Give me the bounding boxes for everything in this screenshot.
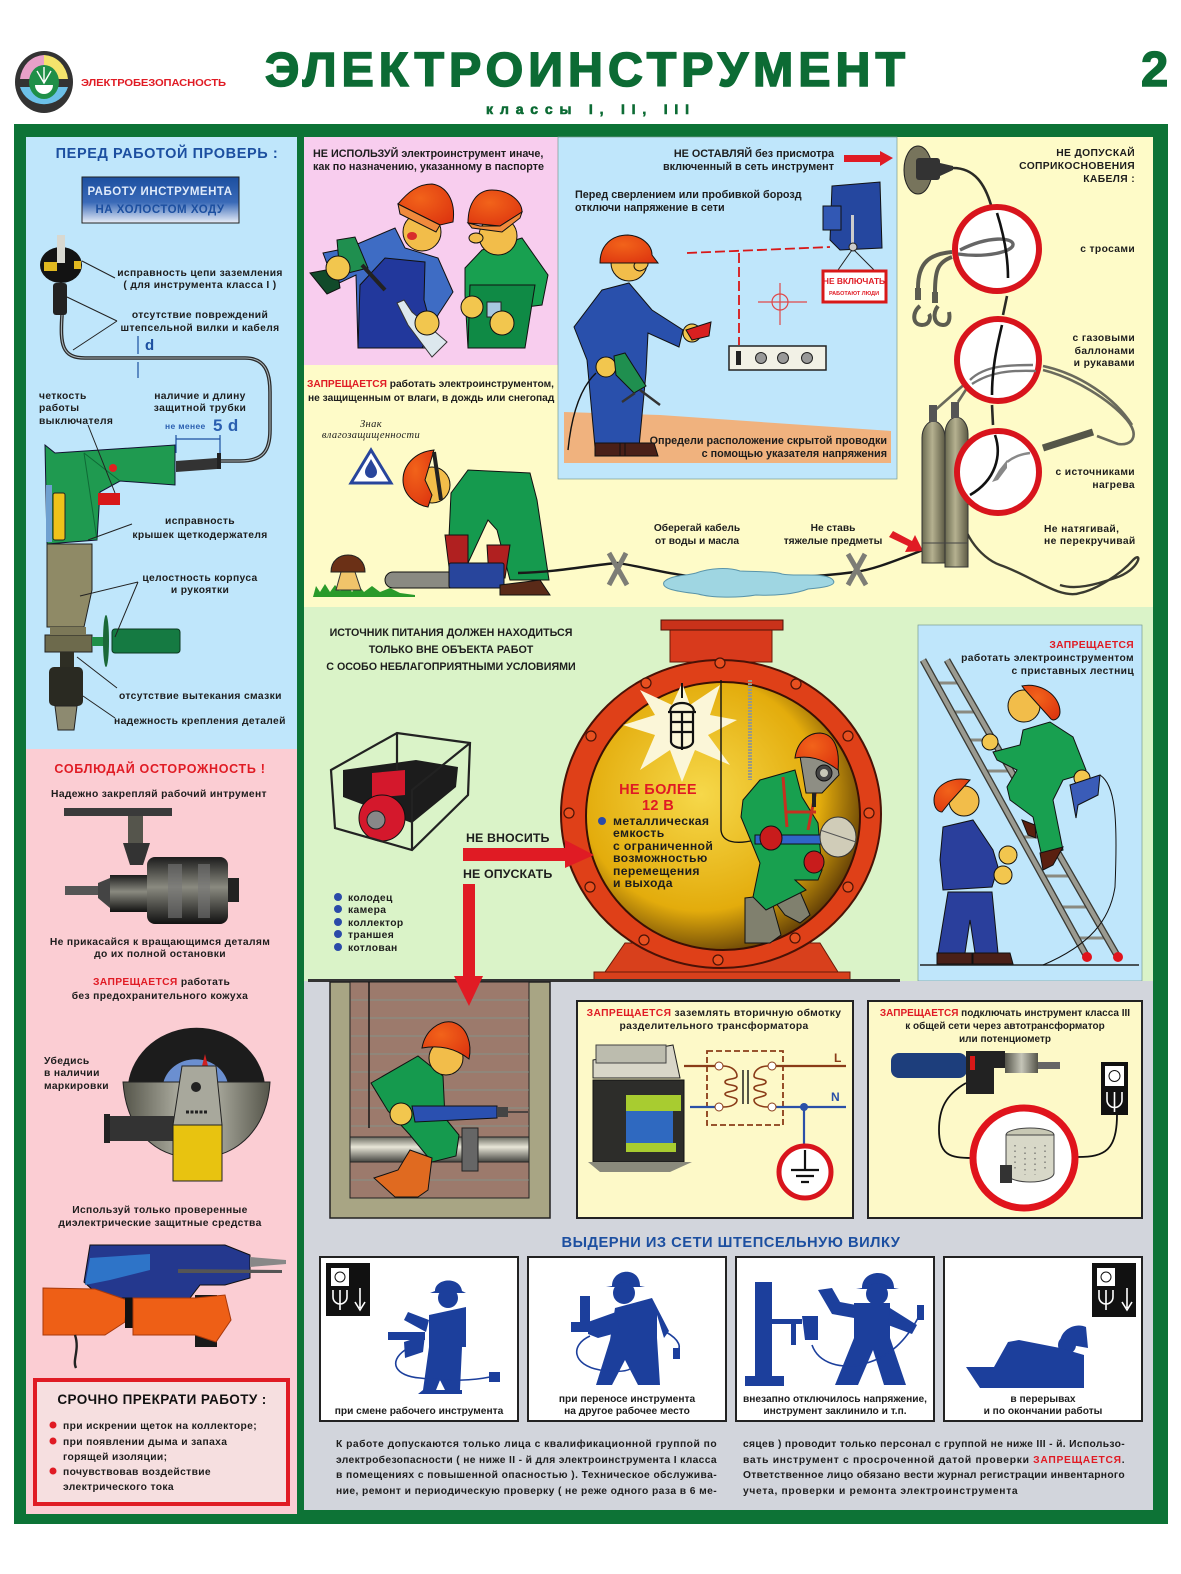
- list: confined spaces: котлован: [348, 943, 398, 954]
- logo caption: ЭЛЕКТРОБЕЗОПАСНОСТЬ: [81, 77, 227, 89]
- illustration: transformer unit: [588, 1045, 692, 1172]
- labels: check list: отсутствие вытекания смазки: [119, 691, 282, 702]
- panel: before work check: [26, 137, 297, 749]
- panel: transformer: [577, 1001, 853, 1218]
- text: max 12 V: перемещения: [613, 864, 700, 878]
- heading: unplug: ВЫДЕРНИ ИЗ СЕТИ ШТЕПСЕЛЬНУЮ ВИЛКУ: [562, 1235, 901, 1251]
- card: breaks: в перерывах: [1010, 1394, 1076, 1405]
- callout: stop work: при появлении дыма и запаха: [63, 1437, 227, 1448]
- caption: do not touch: Не прикасайся к вращающимся деталям: [50, 937, 270, 948]
- illustration: gloved hands with drill: [43, 1245, 286, 1368]
- caption: fix tool: Надежно закрепляй рабочий интрумент: [51, 788, 267, 800]
- text: max 12 V: с ограниченной: [613, 839, 713, 853]
- sockets: [729, 346, 826, 370]
- panel: transformer: разделительного трансформатора: [619, 1020, 809, 1032]
- labels: check list: защитной трубки: [154, 402, 246, 414]
- panel: disconnect voltage: НЕ ОСТАВЛЯЙ без присмотра: [674, 147, 835, 160]
- text: admission rules right: вать инструмент с просроченной датой проверки ЗАПРЕЩАЕТСЯ.: [743, 1455, 1125, 1466]
- icon: moisture triangle: [351, 450, 391, 483]
- panel: disconnect voltage: [558, 137, 897, 479]
- panel: cable contact: не перекручивай: [1044, 536, 1136, 547]
- heading: caution: СОБЛЮДАЙ ОСТОРОЖНОСТЬ !: [54, 761, 266, 776]
- text: max 12 V: 12 В: [642, 798, 674, 814]
- panel: disconnect voltage: отключи напряжение в сети: [575, 202, 725, 214]
- panel: cable contact: с тросами: [1080, 244, 1135, 255]
- card: voltage lost: инструмент заклинило и т.п.: [763, 1406, 907, 1417]
- panel: yellow top: [304, 137, 1153, 607]
- illustration: well with worker: [330, 982, 550, 1218]
- text: cable care: Не ставь: [811, 523, 855, 534]
- caption: do not touch: [50, 937, 270, 960]
- heading: before work: ПЕРЕД РАБОТОЙ ПРОВЕРЬ :: [56, 144, 278, 162]
- panel: do not misuse: [304, 137, 558, 365]
- panel: grey lower: [304, 979, 1153, 1510]
- text: max 12 V: НЕ БОЛЕЕ: [619, 782, 697, 798]
- panel: cable contact: и рукавами: [1074, 358, 1135, 369]
- callout: stop work: при искрении щеток на коллекторе;: [63, 1421, 257, 1432]
- text: max 12 V: и выхода: [613, 876, 673, 890]
- hooks and rope: [914, 252, 952, 325]
- panel: cable contact: СОПРИКОСНОВЕНИЯ: [1019, 161, 1135, 172]
- card: changing tool: [320, 1257, 518, 1421]
- card: moving: [528, 1257, 726, 1421]
- card: moving: при переносе инструмента: [559, 1394, 695, 1405]
- schematic: transformer circuit: N: [831, 1090, 840, 1104]
- callout: stop work: СРОЧНО ПРЕКРАТИ РАБОТУ :: [57, 1392, 267, 1407]
- panel: cable contact: Не натягивай,: [1044, 524, 1119, 535]
- arrow: to cable panel: [844, 151, 893, 166]
- card: voltage lost: внезапно отключилось напряжение,: [743, 1394, 927, 1405]
- prohibition circle: heat: [957, 431, 1039, 513]
- callout: stop work: горящей изоляции;: [63, 1452, 167, 1463]
- labels: check list: целостность корпуса: [142, 573, 258, 584]
- arrow: red to cylinder: [889, 531, 923, 552]
- text: max 12 V: емкость: [613, 826, 665, 840]
- text: admission rules left: [336, 1438, 717, 1497]
- subtitle: классы I, II, III: [486, 101, 692, 117]
- labels: check list: выключателя: [39, 416, 113, 427]
- text: admission rules left: в помещениях с повышенной опасностью ). Техническое обслужива-: [336, 1469, 717, 1481]
- illustration: worker at ladder foot: [934, 779, 1017, 964]
- labels: check list: четкость: [39, 391, 87, 402]
- callout: stop work: электрического тока: [63, 1482, 174, 1493]
- list: confined spaces: траншея: [348, 930, 394, 941]
- panel: cable contact: нагрева: [1092, 480, 1135, 491]
- text: moisture forbidden: ЗАПРЕЩАЕТСЯ работать электроинструментом,: [307, 378, 554, 390]
- illustration: drill body: [45, 445, 221, 730]
- baseline of tank: [308, 979, 900, 982]
- arrows: do not bring in: [454, 840, 594, 1006]
- icon: forbidden ground: [779, 1146, 831, 1198]
- illustration: angle grinder: [104, 1028, 270, 1181]
- text: moisture sign: Знак: [360, 419, 382, 430]
- panel: power source: С ОСОБО НЕБЛАГОПРИЯТНЫМИ УСЛОВИЯМИ: [326, 661, 576, 673]
- card: breaks: и по окончании работы: [984, 1405, 1102, 1417]
- panel: disconnect voltage: включенный в сеть инструмент: [663, 161, 834, 173]
- icon: forbidden autotransformer: [973, 1108, 1075, 1208]
- illustration: worker with drill and bottle: [310, 184, 454, 357]
- ladder panel: [918, 625, 1142, 981]
- illustration: worker with saw: [385, 450, 550, 595]
- caption: check marking: маркировки: [44, 1081, 109, 1092]
- title: ЭЛЕКТРОИНСТРУМЕНТ: [265, 44, 910, 97]
- floor: [564, 412, 891, 463]
- card: moving: на другое рабочее место: [564, 1405, 690, 1417]
- caption: dielectric: [58, 1205, 262, 1229]
- labels: check list: крышек щеткодержателя: [132, 530, 268, 541]
- panel: disconnect voltage: Перед сверлением или пробивкой борозд: [575, 189, 802, 201]
- text: admission rules left: электробезопасности ( не ниже II - й для электроинструмента I класса: [336, 1454, 717, 1466]
- list: confined spaces: колодец: [348, 893, 393, 904]
- caption: check marking: Убедись: [44, 1055, 90, 1067]
- caption: check marking: [44, 1055, 109, 1092]
- text: admission rules left: ние, ремонт и периодическую проверку ( не реже одного раза в 6 ме-: [336, 1486, 717, 1497]
- panel: transformer: ЗАПРЕЩАЕТСЯ заземлять вторичную обмотку: [587, 1007, 841, 1019]
- text: max 12 V: металлическая: [613, 814, 709, 828]
- caption: guard forbidden: [72, 976, 248, 1002]
- text: moisture forbidden: [307, 378, 555, 404]
- text: ladder forbidden: с приставных лестниц: [1012, 666, 1134, 677]
- labels: check list: [39, 268, 286, 727]
- labels: check list: работы: [39, 402, 79, 414]
- labels: check list: 5 d: [213, 416, 239, 435]
- poster number: 2: [1141, 43, 1169, 97]
- text: cable care: [654, 522, 882, 547]
- schematic: transformer circuit: L: [834, 1051, 842, 1065]
- list: confined spaces: [334, 893, 404, 954]
- illustration: grass and mushroom: [313, 555, 415, 597]
- labels: do not bring in: НЕ ОПУСКАТЬ: [463, 867, 552, 881]
- labels: check list: не менее: [165, 421, 206, 431]
- callout: stop work: [35, 1380, 288, 1504]
- cable on ground: [518, 550, 923, 579]
- labels: check list: надежность крепления деталей: [114, 716, 286, 727]
- puddle: [664, 569, 834, 597]
- caption: dielectric: Используй только проверенные: [72, 1205, 248, 1216]
- panel: power source: ТОЛЬКО ВНЕ ОБЪЕКТА РАБОТ: [369, 644, 534, 656]
- text: ladder forbidden: ЗАПРЕЩАЕТСЯ: [1049, 640, 1134, 651]
- badge: idle test: НА ХОЛОСТОМ ХОДУ: [96, 204, 225, 216]
- illustration: worker on ladder: [982, 685, 1116, 965]
- text: ladder forbidden: [961, 640, 1134, 677]
- target cross: [758, 283, 807, 325]
- list: confined spaces: коллектор: [348, 918, 404, 929]
- cables: [939, 1083, 1117, 1158]
- labels: check list: исправность цепи заземления: [117, 268, 283, 279]
- text: max 12 V: возможностью: [613, 851, 708, 865]
- panel: class III: или потенциометр: [959, 1034, 1051, 1045]
- labels: check list: исправность: [165, 516, 235, 527]
- panel: disconnect voltage: Определи расположение скрытой проводки: [650, 435, 887, 447]
- illustration: breaker box and sign: РАБОТАЮТ ЛЮДИ: [829, 291, 879, 297]
- panel: cable contact: с источниками: [1056, 467, 1135, 478]
- labels: check list: ( для инструмента класса I ): [123, 280, 277, 291]
- labels: check list: d: [145, 337, 155, 354]
- gas cylinders: [922, 402, 968, 567]
- labels: check list: отсутствие повреждений: [132, 310, 268, 321]
- panel: power source: ИСТОЧНИК ПИТАНИЯ ДОЛЖЕН НАХОДИТЬСЯ: [330, 627, 572, 639]
- illustration: ladder: [923, 660, 1123, 962]
- labels: check list: штепсельной вилки и кабеля: [121, 322, 279, 334]
- floor line: [920, 964, 1139, 966]
- hidden wiring: [687, 247, 830, 345]
- caption: guard forbidden: без предохранительного кожуха: [72, 990, 248, 1002]
- illustration: plug and cable: [40, 235, 270, 461]
- text: admission rules left: К работе допускаются только лица с квалификационной группой по: [336, 1438, 717, 1450]
- text: moisture forbidden: не защищенным от влаги, в дождь или снегопад: [308, 393, 555, 404]
- panel: power source: [304, 607, 1153, 981]
- logo: [15, 51, 73, 113]
- prohibition circle: ropes: [955, 207, 1039, 291]
- labels: check list: наличие и длину: [154, 391, 246, 402]
- card: breaks: [944, 1257, 1142, 1421]
- hoses: [933, 366, 1134, 444]
- illustration: tool: [891, 1051, 1060, 1094]
- illustration: drill chuck: [64, 808, 239, 924]
- text: cable care: Оберегай кабель: [654, 522, 740, 534]
- text: moisture sign: влагозащищенности: [322, 430, 420, 441]
- panel: cable contact: [904, 146, 1138, 594]
- schematic: transformer circuit: [684, 1051, 846, 1145]
- panel: cable contact: КАБЕЛЯ :: [1083, 174, 1135, 185]
- illustration: tank: [561, 620, 881, 981]
- text: ladder forbidden: работать электроинструментом: [961, 652, 1134, 664]
- text: cable care: от воды и масла: [655, 536, 739, 547]
- card: changing tool: при смене рабочего инструмента: [335, 1405, 504, 1417]
- text: max 12 V: [598, 782, 713, 890]
- caption: dielectric: диэлектрические защитные средства: [58, 1218, 262, 1229]
- text: admission rules right: [743, 1439, 1125, 1497]
- text: admission rules right: Ответственное лицо обязано вести журнал регистрации инвентарного: [743, 1469, 1125, 1481]
- icon: wall socket: [904, 146, 953, 194]
- caption: guard forbidden: ЗАПРЕЩАЕТСЯ работать: [93, 976, 230, 988]
- list: confined spaces: камера: [348, 905, 386, 916]
- panel: cable contact: НЕ ДОПУСКАЙ: [1056, 146, 1135, 159]
- icon: crossed bars right: [848, 554, 866, 585]
- prohibition circle: gas: [957, 319, 1039, 401]
- cable: [953, 168, 1007, 425]
- icon: crossed bars left: [609, 553, 627, 585]
- icon: socket plug: [1101, 1062, 1128, 1115]
- illustration: worker with tester: [568, 235, 711, 456]
- torch: [1043, 432, 1093, 448]
- panel: do not misuse: НЕ ИСПОЛЬЗУЙ электроинструмент иначе,: [313, 147, 543, 160]
- illustration: worker in gas mask: [721, 680, 856, 943]
- panel: cable contact: баллонами: [1075, 345, 1135, 357]
- illustration: breaker box and sign: НЕ ВКЛЮЧАТЬ: [823, 276, 885, 286]
- text: moisture sign: [322, 419, 420, 441]
- panel: disconnect voltage: с помощью указателя напряжения: [702, 448, 887, 460]
- illustration: generator: [331, 733, 470, 850]
- callout: stop work: почувствовав воздействие: [63, 1467, 211, 1478]
- caption: do not touch: до их полной остановки: [94, 949, 226, 960]
- leader lines: [67, 261, 138, 718]
- text: admission rules right: учета, проверки и ремонта электроинструмента: [743, 1486, 1018, 1497]
- panel: class III: ЗАПРЕЩАЕТСЯ подключать инструмент класса III: [880, 1008, 1130, 1019]
- badge: idle test: [82, 177, 239, 223]
- illustration: worker in green: [461, 190, 548, 348]
- badge: idle test: РАБОТУ ИНСТРУМЕНТА: [88, 186, 232, 198]
- illustration: breaker box and sign: [823, 182, 886, 302]
- labels: check list: и рукоятки: [171, 585, 229, 596]
- panel: class III: к общей сети через автотрансформатор: [905, 1020, 1105, 1032]
- text: admission rules right: сяцев ) проводит только персонал с группой не ниже III - й. Использо-: [743, 1439, 1125, 1450]
- card: voltage lost: [736, 1257, 934, 1421]
- text: cable care: тяжелые предметы: [784, 536, 882, 547]
- panel: do not misuse: как по назначению, указанному в паспорте: [313, 161, 544, 173]
- dimension arrows: [138, 336, 220, 453]
- caption: check marking: в наличии: [44, 1068, 100, 1079]
- labels: do not bring in: [463, 831, 552, 881]
- panel: class III: [868, 1001, 1142, 1218]
- panel: caution: [26, 749, 297, 1514]
- panel: cable contact: с газовыми: [1073, 333, 1135, 344]
- labels: do not bring in: НЕ ВНОСИТЬ: [466, 831, 550, 845]
